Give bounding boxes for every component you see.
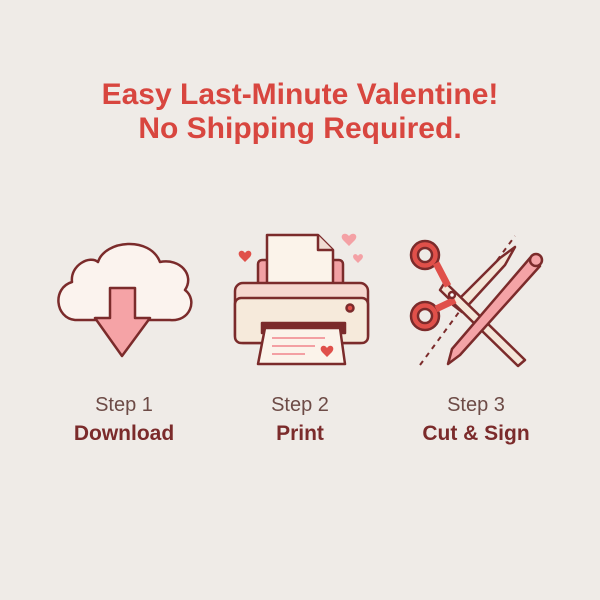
step 1: Step 1 bbox=[95, 394, 153, 416]
step 1: Download bbox=[74, 422, 174, 445]
step 2: Print bbox=[276, 422, 324, 445]
icon: scissors and pen bbox=[411, 236, 542, 366]
title: No Shipping Required. bbox=[138, 112, 462, 145]
step 2: Step 2 bbox=[271, 394, 329, 416]
step 2 bbox=[271, 394, 329, 445]
step 1 bbox=[74, 394, 174, 445]
step 3: Cut & Sign bbox=[422, 422, 530, 445]
step 3 bbox=[422, 394, 530, 445]
title: Easy Last-Minute Valentine! bbox=[102, 78, 498, 111]
title bbox=[102, 78, 498, 145]
icon: printer bbox=[235, 234, 368, 364]
step 3: Step 3 bbox=[447, 394, 505, 416]
icon: cloud download bbox=[58, 244, 191, 356]
